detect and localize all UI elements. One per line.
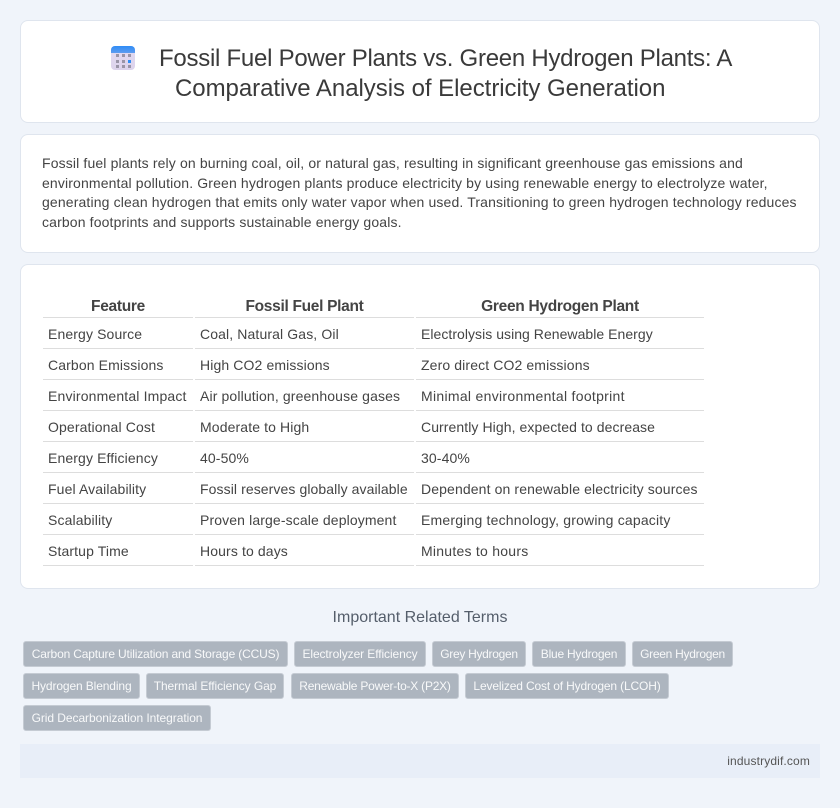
table: Scalability — [48, 512, 112, 528]
table: Hours to days — [200, 543, 288, 559]
intro paragraph: environmental pollution. Green hydrogen plants produce electricity by using renewable energy to electrolyze water, — [42, 175, 768, 191]
title: Comparative Analysis of Electricity Generation — [175, 75, 665, 102]
table: Electrolysis using Renewable Energy — [421, 326, 653, 342]
related term tags: Grey Hydrogen — [440, 647, 518, 661]
table: Currently High, expected to decrease — [421, 419, 655, 435]
table: Environmental Impact — [48, 388, 187, 404]
related term tags: Thermal Efficiency Gap — [154, 679, 276, 693]
table: Zero direct CO2 emissions — [421, 357, 590, 373]
related term tags: Carbon Capture Utilization and Storage (CCUS) — [32, 647, 279, 661]
related term tags: Blue Hydrogen — [541, 647, 617, 661]
table: Fuel Availability — [48, 481, 146, 497]
heading: related terms: Important Related Terms — [333, 609, 507, 626]
table: Minimal environmental footprint — [421, 388, 625, 404]
table: Minutes to hours — [421, 543, 528, 559]
table: Air pollution, greenhouse gases — [200, 388, 400, 404]
header row — [43, 298, 704, 318]
table: Moderate to High — [200, 419, 309, 435]
icon: calendar — [111, 46, 135, 70]
footer — [20, 744, 820, 778]
table: Emerging technology, growing capacity — [421, 512, 671, 528]
header panel — [20, 20, 820, 123]
table: Startup Time — [48, 543, 129, 559]
header row: Fossil Fuel Plant — [245, 298, 364, 315]
footer source: industrydif.com — [727, 754, 810, 768]
intro paragraph: generating clean hydrogen that emits only water vapor when used. Transitioning to green hydrogen technology reduces — [42, 194, 797, 210]
panel: introduction — [20, 134, 820, 253]
intro paragraph — [42, 155, 797, 230]
title: Fossil Fuel Power Plants vs. Green Hydrogen Plants: A — [159, 45, 732, 72]
related term tags: Grid Decarbonization Integration — [32, 711, 202, 725]
header row: Feature — [91, 298, 145, 315]
related term tags: Renewable Power-to-X (P2X) — [299, 679, 451, 693]
related term tags: Hydrogen Blending — [31, 679, 132, 693]
table: 30-40% — [421, 450, 470, 466]
panel: comparison table — [20, 264, 820, 589]
table: Coal, Natural Gas, Oil — [200, 326, 339, 342]
table: Carbon Emissions — [48, 357, 164, 373]
table: Energy Source — [48, 326, 142, 342]
intro paragraph: Fossil fuel plants rely on burning coal, oil, or natural gas, resulting in significant greenhouse gas emissions and — [42, 155, 743, 171]
title — [159, 45, 732, 102]
table: Dependent on renewable electricity sources — [421, 481, 698, 497]
header row: Green Hydrogen Plant — [481, 298, 639, 315]
table: Fossil reserves globally available — [200, 481, 408, 497]
table: 40-50% — [200, 450, 249, 466]
related term tags: Green Hydrogen — [640, 647, 725, 661]
table: Operational Cost — [48, 419, 155, 435]
table: High CO2 emissions — [200, 357, 330, 373]
table: Proven large-scale deployment — [200, 512, 396, 528]
table: Energy Efficiency — [48, 450, 158, 466]
related term tags — [23, 641, 733, 731]
related term tags: Levelized Cost of Hydrogen (LCOH) — [473, 679, 661, 693]
intro paragraph: carbon footprints and supports sustainable energy goals. — [42, 214, 402, 230]
related term tags: Electrolyzer Efficiency — [302, 647, 418, 661]
table — [43, 298, 704, 566]
